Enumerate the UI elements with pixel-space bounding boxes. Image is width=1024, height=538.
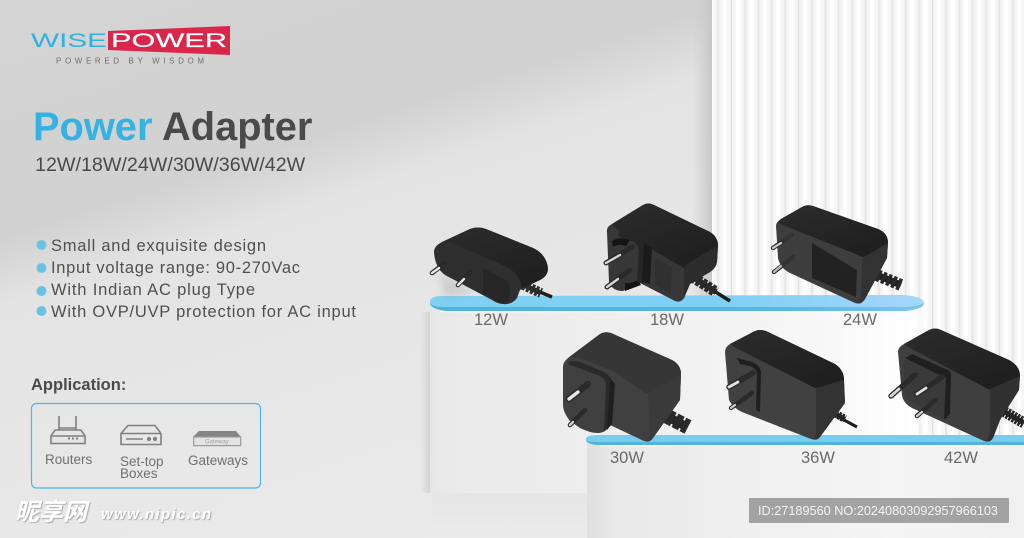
- feature bullets: Small and exquisite design: [51, 237, 266, 255]
- icon: gateway: [193, 431, 241, 446]
- adapter 42W: [891, 328, 1024, 442]
- label 18W: 18W: [650, 311, 684, 329]
- icon: router: [51, 416, 85, 444]
- label: routers: Routers: [45, 452, 93, 467]
- watermark: www.nipic.cn: [101, 506, 211, 523]
- upper blue shelf: [430, 295, 924, 312]
- title: Power Adapter: [33, 105, 312, 149]
- icon: set-top box: [121, 426, 161, 444]
- label 24W: 24W: [843, 311, 877, 329]
- logo: POWERED BY WISDOM: [56, 56, 204, 66]
- feature bullets: [36, 237, 356, 321]
- application panel: [32, 404, 260, 488]
- adapter 18W: [606, 204, 730, 302]
- logo: WISE: [31, 30, 107, 52]
- adapter 24W: [773, 205, 901, 304]
- label: set-top boxes: Boxes: [120, 466, 158, 481]
- lower blue shelf: [586, 435, 1024, 446]
- ribbed white wall panel: [712, 0, 1024, 538]
- logo: [31, 26, 230, 66]
- wattage subtitle: 12W/18W/24W/30W/36W/42W: [35, 154, 306, 176]
- application heading: Application:: [31, 376, 126, 394]
- image id stamp: [749, 498, 1009, 523]
- label 36W: 36W: [801, 449, 835, 467]
- logo: POWER: [111, 30, 227, 52]
- lower white pedestal: [587, 442, 1024, 538]
- label 42W: 42W: [944, 449, 978, 467]
- upper white pedestal: [430, 308, 924, 493]
- watermark: 昵享网: [15, 499, 90, 526]
- adapter 36W: [725, 330, 857, 440]
- lower base block: [432, 493, 588, 538]
- adapter 30W: [563, 332, 688, 442]
- icon: gateway: Gateway: [205, 440, 229, 446]
- label: set-top boxes: Set-top: [120, 454, 164, 469]
- image id stamp: ID:27189560 NO:20240803092957966103: [758, 503, 998, 518]
- label 12W: 12W: [474, 311, 508, 329]
- feature bullets: Input voltage range: 90-270Vac: [51, 259, 300, 277]
- feature bullets: With Indian AC plug Type: [51, 281, 255, 299]
- label: gateways: Gateways: [188, 453, 248, 468]
- label 30W: 30W: [610, 449, 644, 467]
- adapter 12W: [432, 228, 552, 304]
- feature bullets: With OVP/UVP protection for AC input: [51, 303, 356, 321]
- watermark: [15, 499, 211, 526]
- upper pedestal side shadow: [420, 312, 430, 493]
